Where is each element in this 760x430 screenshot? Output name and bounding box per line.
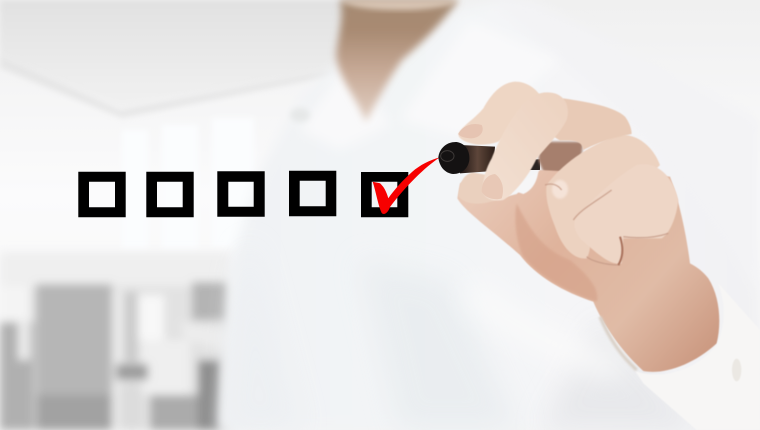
checkbox 3 (217, 171, 265, 217)
pinky finger (574, 164, 678, 264)
knuckle highlights (552, 180, 568, 199)
middle finger (483, 92, 568, 201)
thumb (459, 173, 512, 204)
ceiling (0, 0, 370, 108)
ring finger (546, 135, 660, 258)
bright windows (122, 118, 254, 250)
cuff (598, 283, 760, 430)
hand holding marker (438, 82, 760, 430)
neck (336, 0, 458, 122)
checkbox 2 (146, 172, 194, 217)
red check mark (373, 157, 440, 214)
far pen end (525, 159, 540, 170)
checkbox 4 (289, 171, 336, 216)
palm shading (515, 203, 597, 302)
marker cap (438, 142, 469, 174)
blurred man in white shirt (218, 0, 760, 430)
knuckle creases (545, 184, 668, 265)
conference table (0, 252, 232, 430)
palm and wrist (457, 170, 719, 372)
marker tip (441, 151, 454, 161)
checkbox 1 (78, 172, 126, 217)
marker barrel (460, 145, 495, 173)
checklist boxes (78, 171, 408, 217)
cuff button (732, 359, 741, 381)
gap of white (513, 171, 538, 194)
knuckle and back of hand (543, 98, 632, 150)
fingernail index (458, 124, 483, 138)
index finger (458, 82, 540, 145)
checkbox 5 (361, 172, 408, 217)
cuff shadow (600, 317, 637, 370)
fingernail middle (482, 174, 503, 199)
shirt (218, 0, 760, 430)
gap shadow between fingers (538, 142, 583, 180)
